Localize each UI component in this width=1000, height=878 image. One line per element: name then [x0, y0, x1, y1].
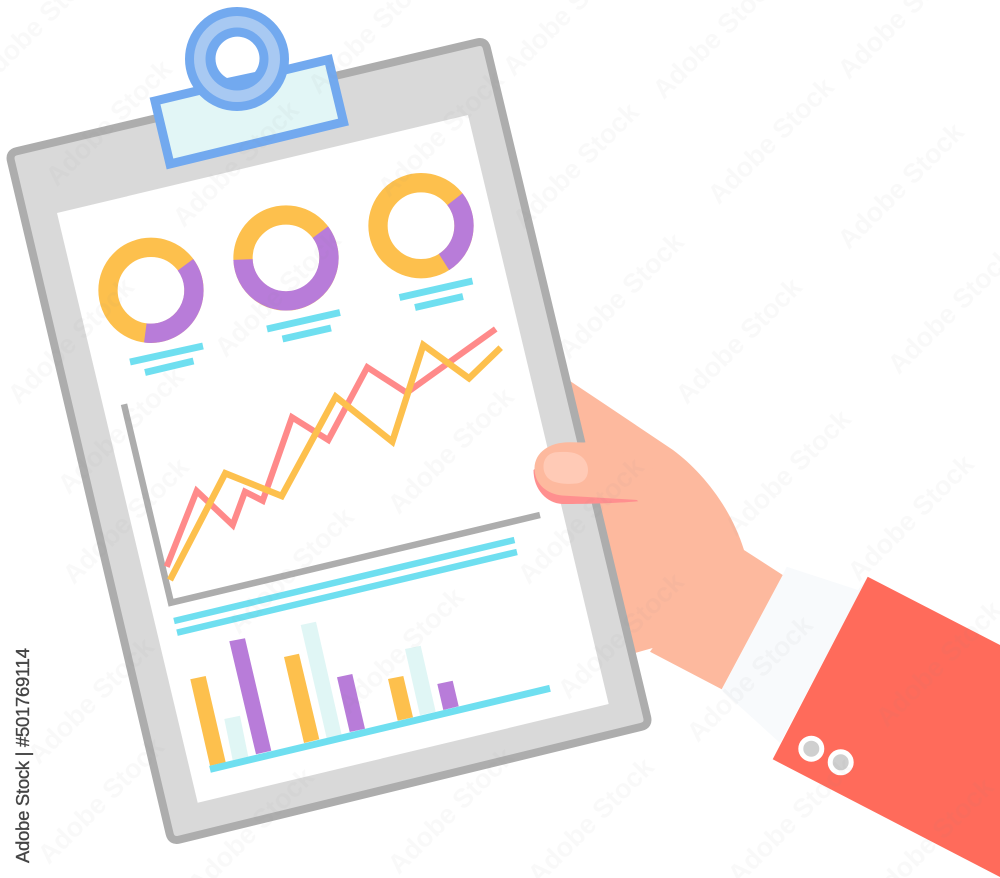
- watermark: Adobe Stock: [167, 94, 305, 233]
- thumbnail: [544, 452, 588, 484]
- watermark: Adobe Stock: [552, 226, 690, 365]
- clipboard: [11, 12, 648, 840]
- watermark: Adobe Stock: [57, 451, 195, 590]
- watermark: Adobe Stock: [842, 448, 980, 587]
- watermark: Adobe Stock: [222, 501, 360, 640]
- line chart caption lines: [174, 540, 517, 633]
- donut 1 caption lines: [130, 346, 203, 372]
- donut chart 1: [108, 247, 194, 333]
- paper sheet: [57, 115, 609, 803]
- bar chart: [190, 622, 550, 769]
- donut chart 2: [243, 215, 329, 301]
- jacket sleeve: [773, 577, 1000, 877]
- line chart: [124, 329, 540, 603]
- watermark: Adobe Stock: [372, 64, 510, 203]
- watermark: Adobe Stock: [209, 224, 347, 363]
- thumb: [534, 440, 655, 504]
- watermark: Adobe Stock: [719, 403, 857, 542]
- line chart axes: [124, 404, 540, 603]
- red data line: [167, 329, 496, 567]
- donut chart 3: [378, 183, 464, 269]
- watermark: Adobe Stock: [512, 451, 650, 590]
- donut 3 caption lines: [400, 281, 472, 308]
- clip ring: [190, 12, 284, 106]
- watermark: Adobe Stock: [332, 581, 470, 720]
- watermark: Adobe Stock: [40, 53, 178, 192]
- watermark: Adobe Stock: [681, 609, 819, 748]
- hand behind the board: [560, 381, 783, 689]
- clip plate: [155, 60, 344, 164]
- donut 2 caption lines: [267, 312, 340, 339]
- watermark: Adobe Stock: [670, 271, 808, 410]
- shirt cuff: [722, 567, 868, 743]
- icon: cuff buttons: [801, 738, 851, 773]
- watermark: Adobe Stock: [2, 271, 140, 410]
- watermark: Adobe Stock: [552, 566, 690, 705]
- watermark: Adobe Stock: [382, 381, 520, 520]
- watermark: Adobe Stock: [832, 116, 970, 255]
- watermark: Adobe Stock: [22, 631, 160, 770]
- watermark: Adobe Stock: [382, 741, 520, 878]
- yellow data line: [170, 345, 501, 580]
- watermark: Adobe Stock: [702, 71, 840, 210]
- watermark: Adobe Stock: [52, 361, 190, 500]
- stock id label: Adobe Stock | #501769114: [12, 648, 33, 863]
- clipboard board: [11, 42, 648, 840]
- watermark: Adobe Stock: [32, 731, 170, 870]
- watermark: Adobe Stock: [507, 96, 645, 235]
- bar chart baseline: [210, 688, 550, 769]
